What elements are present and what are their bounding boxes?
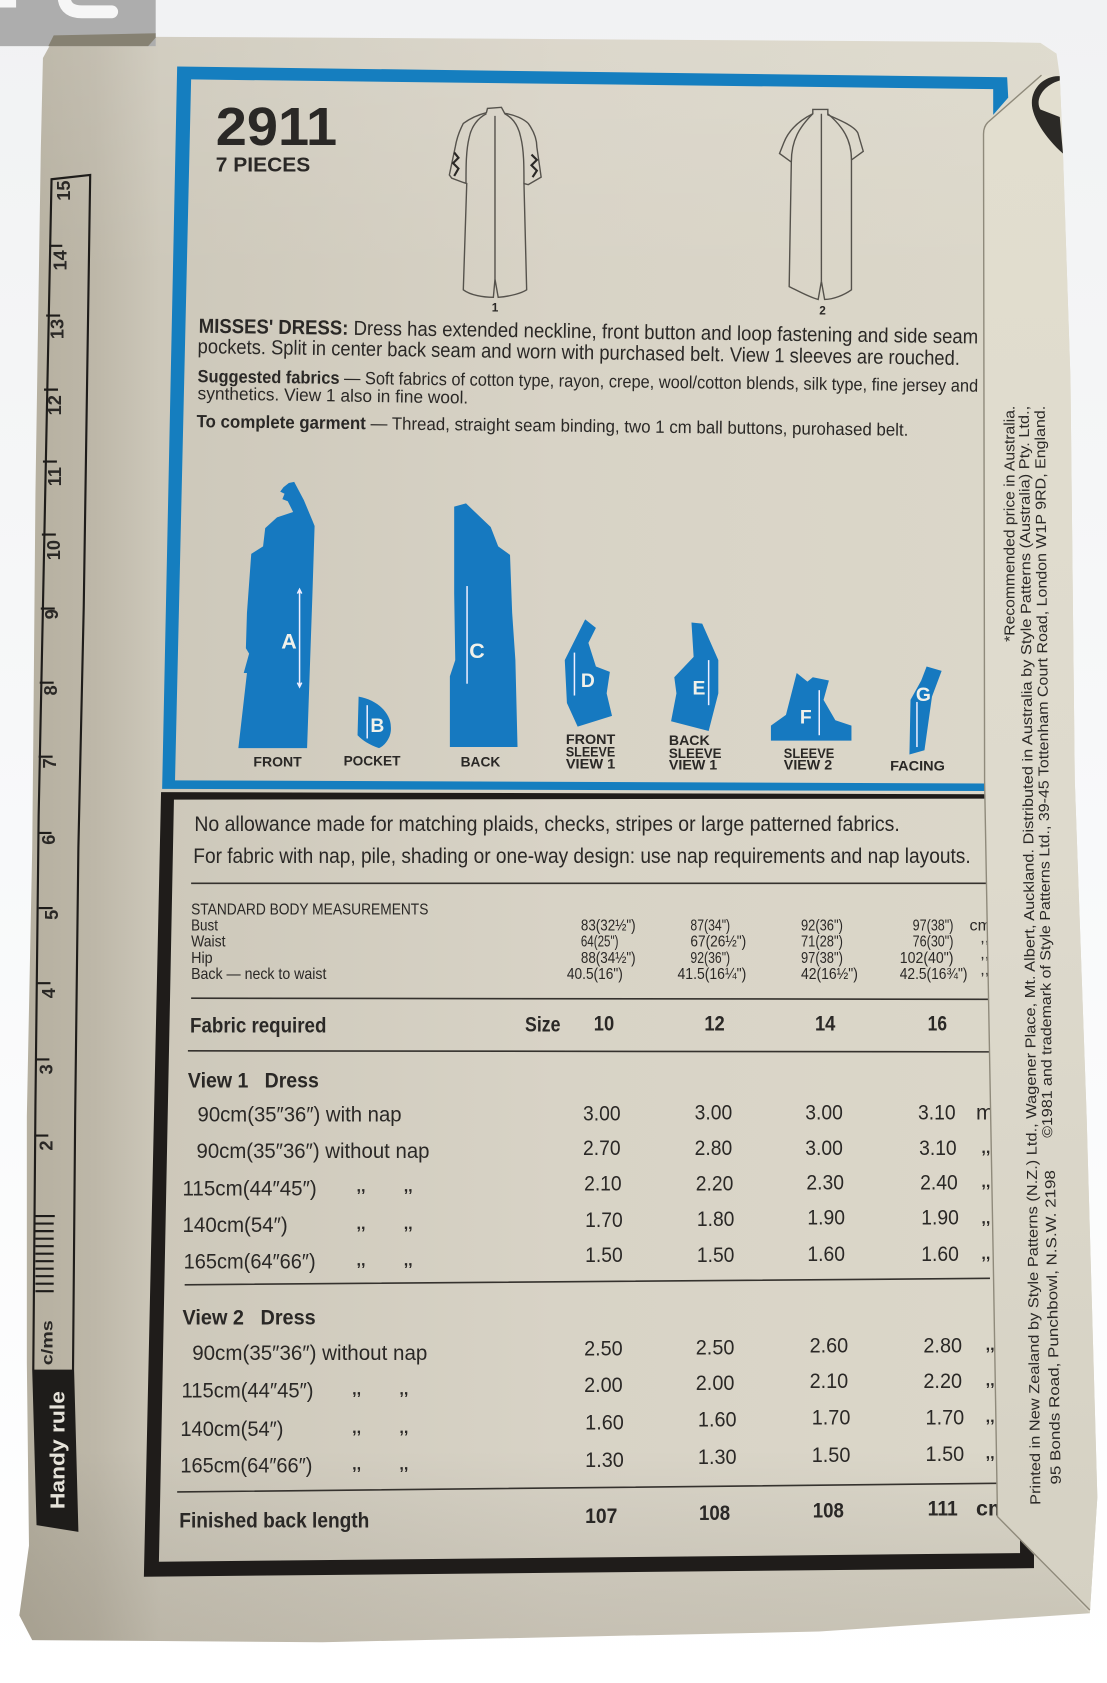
view 1 fabric table: ,,: [356, 1251, 365, 1269]
view 2 fabric table: 2.50: [696, 1336, 734, 1360]
pattern piece G facing: FACING: [890, 758, 945, 774]
view 2 fabric table: ,,: [352, 1455, 361, 1473]
view 1 fabric table: 140cm(54″): [183, 1213, 288, 1237]
view 1 fabric table: 3.00: [805, 1136, 843, 1160]
pattern piece A front: FRONT: [253, 753, 302, 769]
fabric required header: 10: [594, 1011, 614, 1035]
pattern piece B pocket: B: [370, 716, 384, 737]
folded side flap: [984, 75, 1097, 1613]
view 2 fabric table: 1.50: [926, 1442, 964, 1466]
standard body measurements table: 64(25"): [581, 933, 618, 951]
view 1 fabric table: 1.70: [585, 1208, 623, 1232]
view 1 fabric table: m: [976, 1100, 994, 1124]
description text: [196, 316, 978, 440]
rule numbers: 9: [41, 609, 62, 619]
view 1 fabric table: 2.10: [584, 1171, 622, 1195]
pattern piece E back sleeve: BACK: [669, 732, 710, 748]
printing credits: [1003, 406, 1065, 1505]
pattern piece D front sleeve: VIEW 1: [566, 756, 615, 772]
view 2 fabric table: ,,: [986, 1445, 995, 1463]
view 2 fabric table: ,,: [352, 1419, 361, 1437]
pattern piece E back sleeve: E: [693, 678, 706, 699]
view 1 fabric table: View 1 Dress: [188, 1068, 319, 1092]
fabric required header: 16: [928, 1011, 947, 1035]
view 2 fabric table: 1.70: [926, 1405, 964, 1429]
notes on fabric allowance: [193, 813, 971, 868]
standard body measurements table: cm: [970, 917, 991, 935]
pattern piece G facing: [890, 667, 945, 774]
view 1 fabric table: 2.30: [806, 1170, 844, 1194]
printing credits: Printed in New Zealand by Style Patterns (N.Z.) Ltd., Wagener Place, Mt. Albert, Auckland. Distributed in Australia by Style Patterns (Australia) Pty. Ltd.,: [1017, 406, 1044, 1505]
rule ticks: [34, 246, 62, 1291]
pattern piece E back sleeve: [669, 623, 722, 773]
rule numbers: c/ms: [39, 1320, 57, 1365]
pattern piece F sleeve view 2: SLEEVE: [784, 745, 834, 761]
finished back length row: Finished back length: [179, 1508, 369, 1532]
printing credits: 95 Bonds Road, Punchbowl, N.S.W. 2198: [1043, 1170, 1065, 1485]
standard body measurements table: ,,: [980, 928, 989, 946]
pattern piece C back: C: [469, 639, 485, 663]
standard body measurements table: ,,: [980, 944, 989, 962]
rule numbers: 2: [36, 1140, 57, 1151]
standard body measurements table: 42(16½"): [801, 965, 858, 983]
view 1 fabric table: 1.90: [921, 1206, 959, 1230]
pattern piece F sleeve view 2: [771, 673, 851, 773]
rule band: [33, 1370, 77, 1531]
view 1 fabric table: ,,: [404, 1215, 413, 1233]
notes on fabric allowance: For fabric with nap, pile, shading or one-way design: use nap requirements and nap layouts.: [193, 845, 971, 868]
piece count: 7 PIECES: [216, 155, 310, 177]
standard body measurements table: 97(38"): [801, 949, 843, 967]
blue frame: [162, 67, 1008, 791]
pattern piece F sleeve view 2: F: [800, 707, 812, 728]
view 2 fabric table: 1.60: [698, 1407, 737, 1431]
view 1 fabric table: 90cm(35″36″) with nap: [198, 1103, 402, 1127]
finished back length row: [179, 1497, 1007, 1532]
rule numbers: 11: [44, 467, 65, 486]
finished back length row: 107: [585, 1504, 617, 1528]
view 2 fabric table: 2.80: [923, 1333, 962, 1357]
view 2 fabric table: 2.00: [584, 1373, 623, 1397]
rule numbers: 8: [40, 685, 61, 696]
view 1 fabric table: 1.60: [807, 1242, 845, 1266]
view 2 fabric table: 1.30: [698, 1445, 737, 1469]
pattern piece E back sleeve: SLEEVE: [669, 745, 722, 761]
view 1 fabric table: 3.10: [918, 1100, 956, 1124]
finished back length row: cm: [976, 1497, 1007, 1521]
view 1 fabric table: [183, 1068, 994, 1274]
standard body measurements table: 76(30"): [913, 933, 953, 951]
rule numbers: 7: [39, 758, 60, 769]
rule numbers: 5: [41, 910, 62, 920]
fabric required header: 12: [704, 1011, 725, 1035]
fabric required header: Fabric required: [190, 1014, 326, 1038]
rule numbers: 6: [38, 835, 59, 845]
pattern piece C back: [450, 503, 518, 769]
view 1 fabric table: 1.90: [807, 1206, 845, 1230]
view 2 fabric table: 2.60: [810, 1333, 848, 1357]
standard body measurements table: 88(34½"): [581, 949, 636, 967]
pattern number: 2911: [216, 97, 337, 157]
view 1 fabric table: 2.20: [696, 1171, 733, 1195]
view 1 fabric table: ,,: [356, 1177, 365, 1195]
view 2 fabric table: ,,: [986, 1408, 995, 1426]
black frame: [144, 792, 1034, 1577]
rule numbers: 12: [44, 395, 65, 415]
view 1 fabric table: 165cm(64″66″): [184, 1250, 316, 1274]
rule numbers: 15: [53, 180, 74, 201]
rule numbers: 13: [46, 319, 67, 339]
view 2 fabric table: ,,: [352, 1380, 361, 1398]
view 1 fabric table: 90cm(35″36″) without nap: [196, 1139, 430, 1163]
view 2 fabric table: ,,: [399, 1455, 408, 1473]
view 1 fabric table: 3.00: [695, 1100, 732, 1124]
standard body measurements table: STANDARD BODY MEASUREMENTS: [191, 900, 428, 918]
pattern piece D front sleeve: [565, 619, 616, 772]
view 1 fabric table: 3.00: [805, 1100, 843, 1124]
view 1 fabric table: 2.70: [583, 1136, 621, 1160]
view 1 fabric table: ,,: [981, 1210, 990, 1228]
view 1 fabric table: 1.50: [697, 1243, 734, 1267]
standard body measurements table: 83(32½"): [581, 917, 636, 935]
view 1 fabric table: ,,: [404, 1251, 413, 1269]
standard body measurements table: 41.5(16¼"): [678, 965, 746, 983]
standard body measurements table: Waist: [191, 933, 226, 951]
view 1 fabric table: 3.00: [583, 1102, 621, 1126]
view 1 fabric table: 115cm(44″45″): [183, 1177, 317, 1201]
standard body measurements table: 71(28"): [801, 933, 843, 951]
dress view 2: 2: [819, 303, 826, 317]
view 2 fabric table: 1.50: [812, 1443, 850, 1467]
rule numbers: 3: [36, 1064, 57, 1074]
standard body measurements table: [191, 900, 991, 983]
dress view 1: [449, 107, 541, 314]
view 1 fabric table: ,,: [981, 1245, 990, 1263]
pattern piece D front sleeve: D: [581, 671, 595, 692]
view 2 fabric table: 165cm(64″66″): [180, 1454, 312, 1478]
pattern piece F sleeve view 2: VIEW 2: [784, 757, 832, 773]
rule numbers: [36, 180, 74, 1365]
view 1 fabric table: 1.60: [921, 1242, 959, 1266]
view 2 fabric table: 2.00: [696, 1371, 734, 1395]
standard body measurements table: 40.5(16"): [567, 965, 623, 983]
standard body measurements table: 67(26½"): [690, 933, 746, 951]
finished back length row: 111: [928, 1497, 958, 1521]
printing credits: *Recommended price in Australia.: [1003, 406, 1019, 642]
description text: To complete garment — Thread, straight seam binding, two 1 cm ball buttons, purohased belt.: [196, 411, 909, 440]
view 2 fabric table: 1.30: [585, 1448, 624, 1472]
view 2 fabric table: ,,: [399, 1419, 408, 1437]
description text: synthetics. View 1 also in fine wool.: [198, 383, 468, 408]
finished back length row: 108: [813, 1499, 844, 1523]
pattern piece D front sleeve: FRONT: [566, 731, 616, 747]
view 2 fabric table: 140cm(54″): [180, 1417, 283, 1441]
view 2 fabric table: 1.60: [585, 1411, 624, 1435]
view 1 fabric table: 1.80: [697, 1207, 734, 1231]
view 1 fabric table: 1.50: [585, 1243, 623, 1267]
view 1 fabric table: ,,: [404, 1177, 413, 1195]
fabric required header: 14: [815, 1011, 835, 1035]
view 2 fabric table: ,,: [399, 1380, 408, 1398]
view 2 fabric table: ,,: [986, 1336, 995, 1354]
rule band: Handy rule: [47, 1391, 69, 1509]
standard body measurements table: Hip: [191, 949, 213, 967]
view 1 fabric table: ,,: [356, 1215, 365, 1233]
pattern piece D front sleeve: SLEEVE: [566, 744, 615, 760]
rule numbers: 14: [50, 249, 71, 270]
dress view 2: [780, 109, 863, 317]
view 1 fabric table: ,,: [981, 1173, 990, 1191]
pattern piece B pocket: [344, 697, 401, 768]
view 1 fabric table: 3.10: [919, 1136, 957, 1160]
view 1 fabric table: 2.40: [920, 1170, 958, 1194]
standard body measurements table: ,,: [980, 961, 989, 979]
pattern piece E back sleeve: VIEW 1: [669, 757, 717, 773]
fabric required header: [190, 1011, 947, 1038]
view 2 fabric table: 2.50: [584, 1337, 623, 1361]
dress view 1: 1: [492, 300, 499, 314]
description text: MISSES' DRESS: Dress has extended neckline, front button and loop fastening and side seam: [199, 316, 978, 348]
notes on fabric allowance: No allowance made for matching plaids, checks, stripes or large patterned fabrics.: [194, 813, 900, 836]
standard body measurements table: 92(36"): [801, 917, 843, 935]
logo fragment: [1032, 76, 1063, 153]
view 1 fabric table: 2.80: [695, 1136, 732, 1160]
view 2 fabric table: 115cm(44″45″): [181, 1378, 314, 1402]
standard body measurements table: 42.5(16¾"): [900, 965, 967, 983]
standard body measurements table: Back — neck to waist: [191, 965, 327, 983]
pattern piece G facing: G: [916, 685, 931, 706]
view 2 fabric table: 2.20: [923, 1369, 962, 1393]
standard body measurements table: 102(40"): [900, 949, 953, 967]
view 2 fabric table: 90cm(35″36″) without nap: [192, 1341, 427, 1365]
handy rule: [33, 175, 90, 1531]
view 2 fabric table: [180, 1306, 995, 1478]
fabric required header: Size: [525, 1012, 561, 1036]
view 2 fabric table: ,,: [986, 1372, 995, 1390]
printing credits: ©1981 and trademark of Style Patterns Ltd., 39-45 Tottenham Court Road, London W1P 9RD, England.: [1033, 406, 1056, 1138]
pattern piece C back: BACK: [461, 753, 500, 769]
standard body measurements table: 97(38"): [913, 917, 953, 935]
view 2 fabric table: 1.70: [812, 1405, 850, 1429]
standard body measurements table: 87(34"): [690, 917, 730, 935]
screenshot tab: [0, 0, 156, 46]
pattern piece A front: [238, 482, 315, 769]
standard body measurements table: Bust: [191, 917, 218, 935]
view 2 fabric table: 2.10: [810, 1369, 848, 1393]
rule numbers: 10: [43, 540, 64, 560]
rule numbers: 4: [38, 987, 59, 998]
view 2 fabric table: View 2 Dress: [183, 1306, 316, 1330]
finished back length row: 108: [699, 1501, 730, 1525]
standard body measurements table: 92(36"): [690, 949, 730, 967]
pattern piece A front: A: [281, 629, 297, 653]
description text: pockets. Split in center back seam and worn with purchased belt. View 1 sleeves are rouched.: [197, 336, 960, 370]
view 1 fabric table: ,,: [981, 1139, 990, 1157]
pattern piece B pocket: POCKET: [344, 752, 401, 768]
description text: Suggested fabrics — Soft fabrics of cotton type, rayon, crepe, wool/cotton blends, silk type, fine jersey and: [198, 366, 978, 396]
